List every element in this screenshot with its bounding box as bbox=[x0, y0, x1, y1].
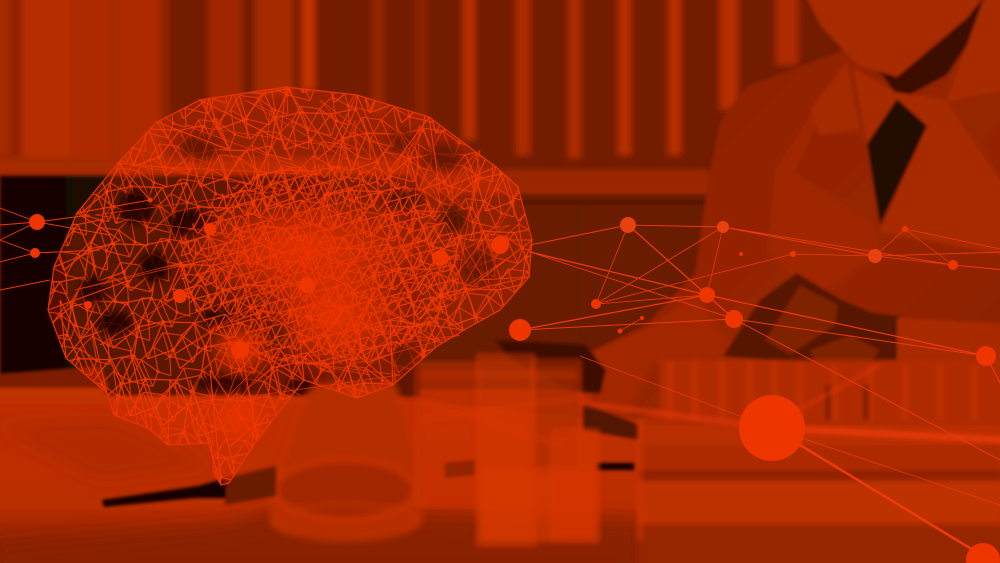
brain nodes bbox=[84, 118, 509, 359]
dark gaps bbox=[80, 129, 496, 391]
desk shading bbox=[0, 420, 640, 563]
surgical mask bbox=[805, 0, 985, 77]
lower wall panels bbox=[0, 176, 712, 396]
brain second mesh bbox=[48, 87, 532, 485]
network connections bbox=[0, 208, 1000, 556]
network nodes bbox=[29, 214, 1000, 563]
scientist in lab coat bbox=[495, 0, 1000, 440]
pen on desk bbox=[102, 460, 634, 507]
brain bright core bbox=[170, 190, 430, 446]
brain outline mesh bbox=[48, 87, 532, 485]
conical flask bbox=[272, 385, 425, 540]
brain inner mesh bbox=[48, 87, 532, 485]
brain mesh layers bbox=[48, 87, 532, 485]
dark cuff bbox=[495, 340, 606, 395]
desk bbox=[0, 366, 1000, 563]
hands bbox=[723, 273, 900, 364]
beakers bbox=[418, 356, 600, 545]
test tube rack bbox=[637, 360, 1000, 563]
necktie bbox=[867, 99, 927, 225]
brain fine mesh bbox=[75, 100, 515, 430]
beaker rims bbox=[416, 355, 598, 545]
shirt neck shadow bbox=[880, 0, 1000, 100]
background wall with curtains bbox=[0, 0, 1000, 175]
shelf band bbox=[0, 158, 710, 194]
brain red tint bbox=[48, 87, 532, 485]
brain dense centre bbox=[180, 165, 460, 365]
brain network bbox=[48, 87, 532, 485]
